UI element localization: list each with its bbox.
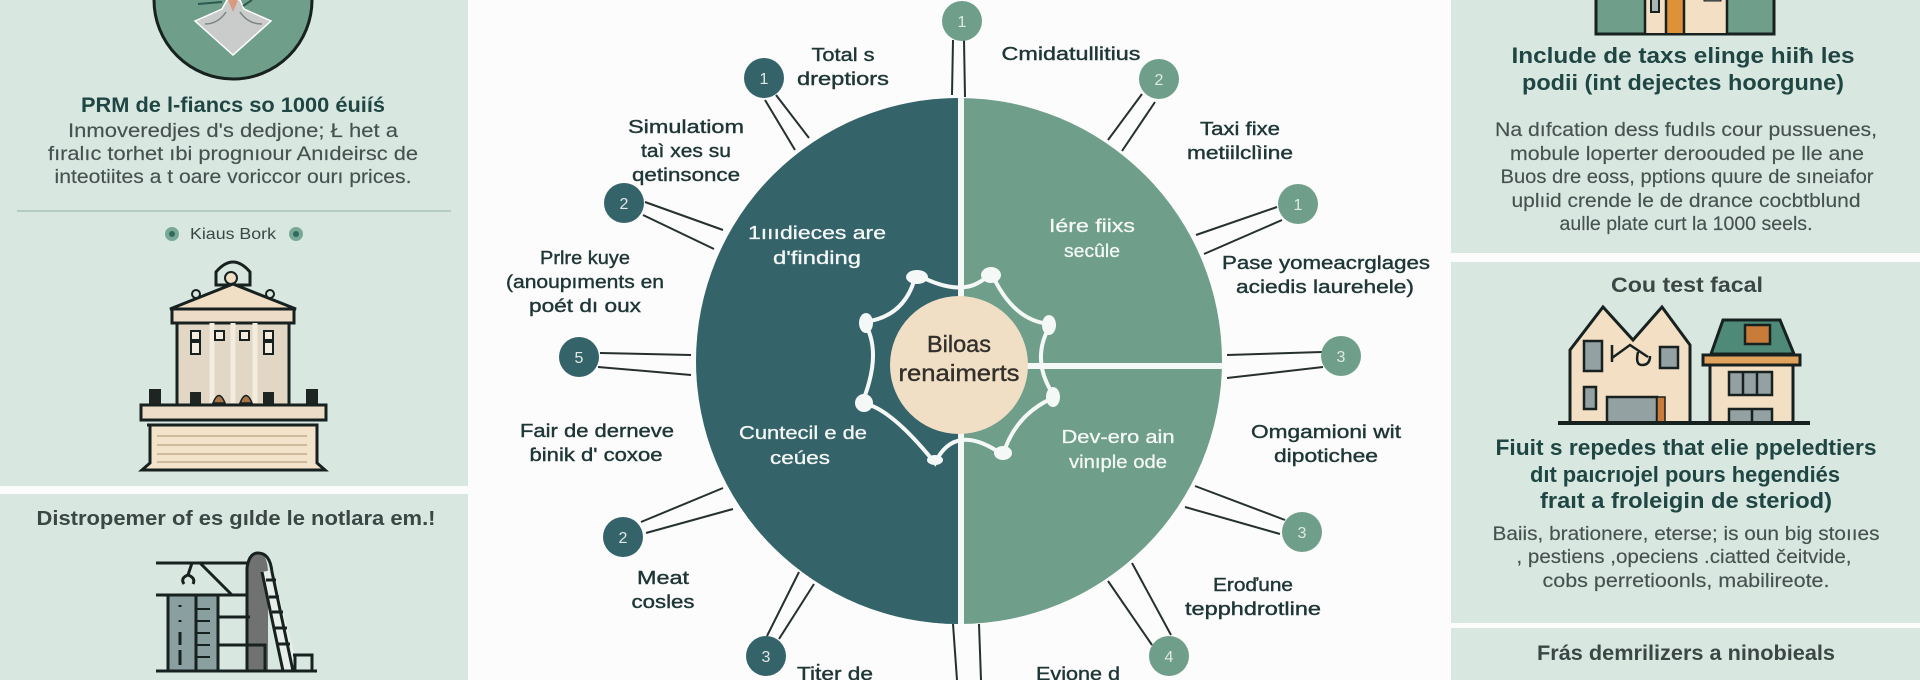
sector labels: Dev-ero ain [1062,426,1174,447]
sub-heading with dots: Kiaus Bork [190,226,277,243]
outer labels: dreptiors [797,68,889,89]
sector labels: ceúes [770,447,830,468]
outer labels: ɓinik d' coxoe [530,444,662,465]
text block [48,120,418,188]
outer labels: metiilclìine [1187,142,1293,163]
sector labels: secûle [1064,240,1120,261]
outer labels: Taxi fixe [1200,118,1280,139]
panel: right bottom [1451,628,1920,680]
heading: Cou test facal [1611,274,1763,297]
text block: , pestiens ,opeciens .ciatted čeitvide, [1516,546,1852,568]
outer labels: (anoupıments en [506,271,664,292]
text block: Na dıfcation dess fudıls cour pussuenes, [1495,119,1877,141]
heading: Frás demrilizers a ninobieals [1537,642,1835,665]
outer labels: Cmidatullitius [1002,43,1140,64]
text block: cobs perretioonls, mabilireote. [1542,570,1830,592]
heading: PRM de l-fiancs so 1000 éuiíś [81,94,385,117]
numbered nodes: 2 [619,530,628,547]
sector labels: d'finding [773,247,861,268]
heading: dıt paıcrıojel pours hegendiés [1530,462,1840,487]
quadrant gaps [961,98,1223,624]
icon: house facade [1596,0,1774,34]
icon: medallion with cloth [154,0,312,79]
numbered nodes: 4 [1165,649,1174,666]
outer labels: Omgamioni wit [1251,421,1401,442]
outer labels: cosles [632,591,694,612]
numbered nodes: 1 [1294,197,1303,214]
right half green [696,98,1222,624]
text block [1495,119,1877,235]
chart: radial diagram [696,98,1223,624]
heading: Distropemer of es gılde le notlara em.! [36,508,436,530]
heading: Fiuit s repedes that elie ppeledtiers [1496,435,1876,460]
text block: mobule loperter deroouded pe lle ane [1510,143,1864,165]
text block: aulle plate curt la 1000 seels. [1560,213,1812,235]
sprocket outline [855,267,1060,465]
sector labels: vinıple ode [1069,451,1167,472]
sector labels: 1ıııdieces are [748,222,886,243]
connector lines [598,40,1323,680]
text block: Inmoveredjes d's dedjone; Ł het a [68,120,398,142]
panel: right top [1451,0,1920,253]
center circle: Biloas [927,331,991,357]
outer labels [506,43,1430,680]
outer labels: poét dı oux [529,295,642,316]
sector labels [739,215,1174,472]
sector labels: Cuntecil e de [739,422,867,443]
text block: Buos dre eoss, pptions quure de sıneiafor [1500,166,1874,188]
numbered nodes [559,1,1361,676]
outer labels: Meat [637,567,689,588]
numbered nodes: 1 [760,71,769,88]
outer labels: tepphdrotline [1185,598,1321,619]
text block: fıralıc torhet ıbi prognıour Anıdeirsc de [48,143,418,165]
text block [1492,523,1880,592]
icon: scaffold and ladder [156,553,317,671]
heading: Include de taxs elinge hiiħ les [1512,43,1854,68]
text block: uplıid crende le de drance cocbtblund [1512,190,1860,212]
outer labels: qetinsonce [632,164,740,185]
heading [1512,43,1854,95]
icon: two houses [1558,307,1810,423]
center circle: renaimerts [898,360,1020,386]
panel: right middle [1451,262,1920,623]
outer labels: Prlre kuye [540,247,630,268]
text block: Baiis, brationere, eterse; is oun big stoııes [1492,523,1880,545]
numbered nodes: 1 [958,14,967,31]
left half dark [696,98,959,624]
outer labels: aciedis laurehele) [1236,276,1414,297]
outer labels: dipotichee [1274,445,1378,466]
heading [1496,435,1876,513]
numbered nodes: 2 [620,196,629,213]
numbered nodes: 3 [1337,349,1346,366]
numbered nodes: 3 [1298,525,1307,542]
panel: left bottom [0,494,468,680]
numbered nodes: 5 [575,350,584,367]
outer labels: Total s [812,44,874,65]
numbered nodes: 3 [762,649,771,666]
sector labels: Iére fiixs [1049,215,1135,236]
text block: inteotiites a t oare voriccor ourı prices. [54,166,411,188]
outer labels: taì xes su [641,140,731,161]
heading: podii (int dejectes hoorgune) [1522,70,1844,95]
heading: fraıt a froleigin de steriod) [1540,488,1832,513]
numbered nodes: 2 [1155,72,1164,89]
outer labels: Fair de derneve [520,420,674,441]
icon: classical building [141,262,326,470]
outer labels: Eroďune [1213,574,1293,595]
panel: left top [0,0,468,486]
sub-heading with dots [165,226,303,243]
outer labels: Pase yomeacrglages [1222,252,1430,273]
outer labels: Simulatiom [628,116,744,137]
center circle [890,296,1028,434]
